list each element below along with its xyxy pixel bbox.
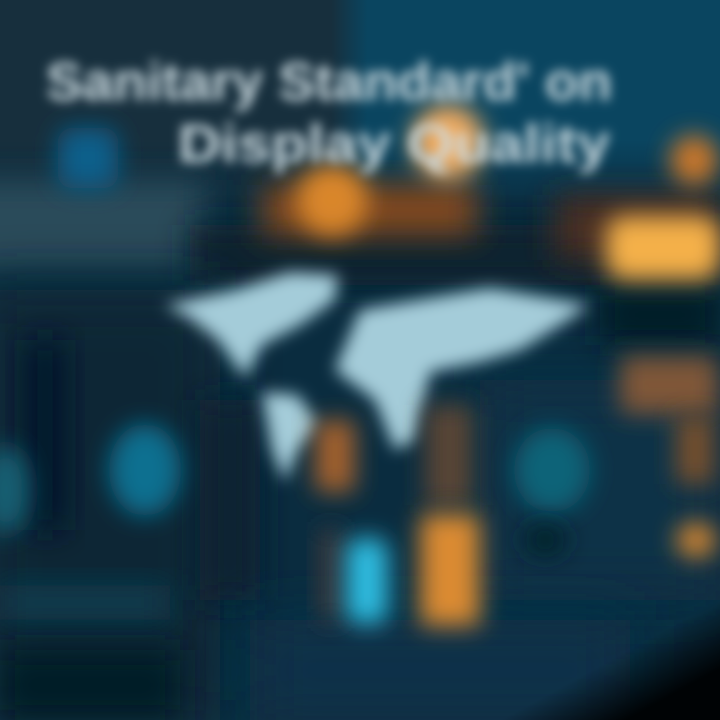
orange bar 3 [420,514,480,626]
continent: north america [165,272,338,378]
faint orange mark [320,530,342,620]
blue blob right [514,428,590,512]
orange dot top right [670,135,718,185]
muted bar 2 [425,405,473,505]
orange sun blob [412,104,484,180]
orange dot lower right [676,522,716,558]
blue blob left [109,424,181,516]
muted orange block upper [620,356,718,414]
icon: blue square top left [58,128,118,188]
orange blob left [296,164,368,236]
world map [165,272,590,482]
glowing yellow panel [606,216,720,280]
orange glow group [262,104,720,280]
blue circle icons [0,424,590,556]
title line 1: Sanitary Standard' on [46,52,612,112]
continent: south america [262,392,318,482]
title [46,52,612,174]
muted orange block lower [676,416,714,484]
continent: eurasia [335,288,590,450]
orange bar 1 [315,420,355,492]
cyan bar [346,538,388,624]
title line 2: Display Quality [178,114,610,174]
orange haze right [555,195,720,260]
bar chart: lower bars [315,405,480,626]
orange haze band [262,185,477,235]
blue blob far left [0,446,30,534]
right side orange stats [620,356,718,558]
dark spot [523,524,567,556]
